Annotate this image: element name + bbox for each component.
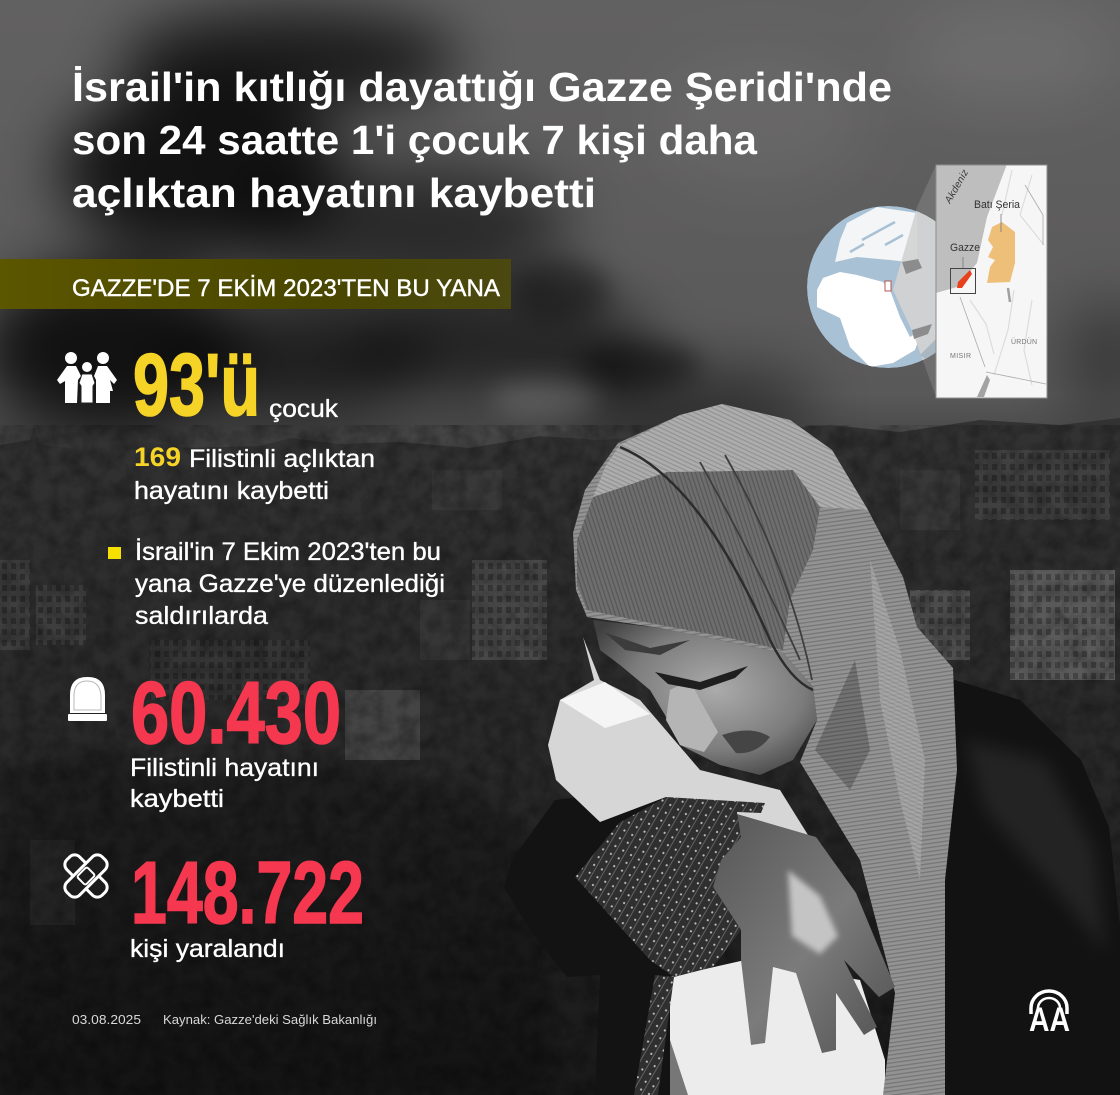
stat: killed: kaybetti <box>130 785 224 813</box>
icon: gravestone <box>68 677 107 721</box>
stat: killed <box>130 663 341 813</box>
gaza marker on globe <box>885 281 891 291</box>
face <box>593 620 817 775</box>
wedge connecting globe to map <box>893 165 936 397</box>
bullet <box>108 547 121 559</box>
banner: GAZZE'DE 7 EKİM 2023'TEN BU YANA <box>72 275 500 302</box>
stat: wounded <box>130 843 364 963</box>
logo: AA: AA <box>1029 1001 1070 1039</box>
text: 169 Filistinli: 169 <box>134 442 181 472</box>
map panel: MISIR <box>950 353 971 360</box>
text: 169 Filistinli: hayatını kaybetti <box>134 477 329 505</box>
banner <box>0 259 511 309</box>
footer: date and source: Kaynak: Gazze'deki Sağlık Bakanlığı <box>163 1013 377 1027</box>
map panel <box>936 164 1047 398</box>
text: attacks note <box>135 537 445 630</box>
text: 169 Filistinli: Filistinli açlıktan <box>189 445 375 473</box>
text: attacks note: İsrail'in 7 Ekim 2023'ten bu <box>135 537 441 566</box>
footer: date and source <box>72 1013 377 1027</box>
hand <box>713 813 895 1053</box>
city buildings <box>0 450 1115 925</box>
stat: killed: 60.430 <box>131 663 341 762</box>
map panel: ÜRDÜN <box>1011 338 1037 346</box>
stat: 93'ü çocuk: çocuk <box>269 395 339 423</box>
globe <box>807 206 936 368</box>
headscarf <box>573 404 957 1095</box>
locator: globe and map <box>807 164 1047 398</box>
stat: wounded: kişi yaralandı <box>130 935 285 963</box>
gaza box <box>950 268 976 294</box>
globe shaded wedge <box>893 211 936 360</box>
icon: family <box>57 352 117 403</box>
text: attacks note: saldırılarda <box>135 602 268 630</box>
text: 169 Filistinli <box>134 442 375 505</box>
city silhouette <box>0 418 1120 1095</box>
title: İsrail'in kıtlığı dayattığı Gazze Şeridi'nde <box>72 64 892 110</box>
stat: killed: Filistinli hayatını <box>130 754 319 782</box>
icon: bandage <box>62 852 110 900</box>
coat <box>504 680 1120 1095</box>
lower sleeve trim <box>634 975 674 1095</box>
text: attacks note: yana Gazze'ye düzenlediği <box>135 570 445 598</box>
title: son 24 saatte 1'i çocuk 7 kişi daha <box>72 117 758 163</box>
footer: date and source: 03.08.2025 <box>72 1013 141 1027</box>
map panel: Akdeniz <box>943 168 971 206</box>
west bank <box>987 222 1015 283</box>
map panel: Batı Şeria <box>974 199 1021 211</box>
stat: wounded: 148.722 <box>131 843 364 942</box>
logo: AA <box>1029 991 1070 1039</box>
stat: 93'ü çocuk: 93'ü <box>133 335 260 434</box>
wrapped child cloth <box>548 637 885 1095</box>
title <box>72 64 892 216</box>
embroidered sleeve cuff <box>575 797 765 977</box>
map panel: Gazze <box>950 242 980 254</box>
title: açlıktan hayatını kaybetti <box>72 170 596 216</box>
woman holding wrapped child <box>504 404 1120 1095</box>
